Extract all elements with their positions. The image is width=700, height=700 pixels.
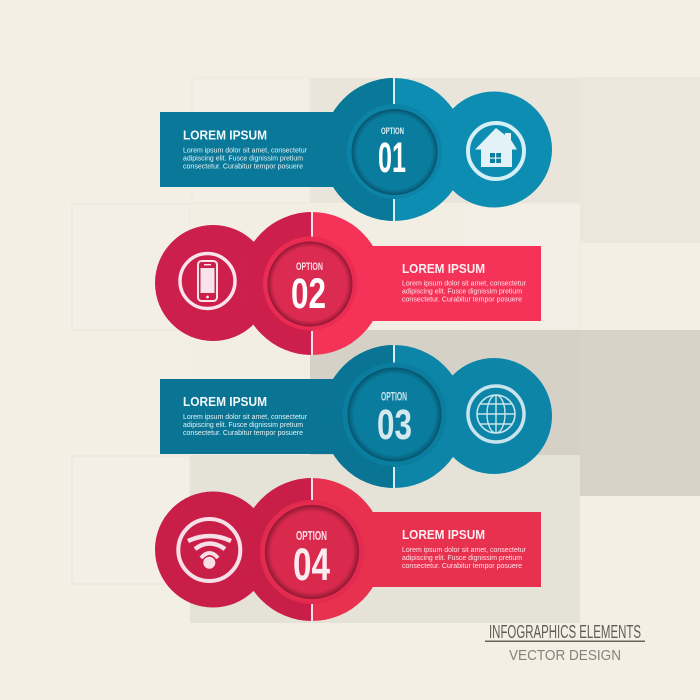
big circle 03 [322, 345, 466, 488]
big circle 02 [240, 212, 384, 355]
description 02: consectetur. Curabitur tempor posuere [402, 296, 522, 304]
icon: wifi [178, 519, 240, 581]
heading 03: LOREM IPSUM [183, 395, 267, 409]
band 03 [160, 379, 360, 454]
option 02 row [155, 212, 541, 355]
description 02: adipiscing elit. Fusce dignissim pretium [402, 288, 522, 296]
option label 03: OPTION [381, 392, 407, 404]
small circle 02 [155, 225, 271, 341]
description 04: consectetur. Curabitur tempor posuere [402, 563, 522, 570]
footer subtitle: VECTOR DESIGN [509, 647, 621, 664]
band 04 [360, 512, 541, 587]
small circle 01 [436, 92, 552, 208]
description 02: Lorem ipsum dolor sit amet, consectetur [402, 280, 527, 288]
description 03: adipiscing elit. Fusce dignissim pretium [183, 422, 303, 429]
band 01 [160, 112, 360, 187]
option label 01: OPTION [381, 126, 404, 137]
option label 02: OPTION [296, 261, 323, 273]
heading 01: LOREM IPSUM [183, 128, 267, 142]
description 01 [183, 148, 308, 170]
small circle 04 [155, 492, 271, 608]
description 04 [402, 547, 527, 570]
small circle 03 [436, 358, 552, 474]
option label 04: OPTION [296, 529, 327, 543]
description 03: Lorem ipsum dolor sit amet, consectetur [183, 414, 308, 421]
heading 04: LOREM IPSUM [402, 528, 485, 542]
big circle 01 [322, 78, 466, 221]
band 02 [360, 246, 541, 321]
option 04 row [155, 478, 541, 621]
description 04: adipiscing elit. Fusce dignissim pretium [402, 555, 522, 562]
number 04: 04 [293, 539, 330, 590]
description 01: Lorem ipsum dolor sit amet, consectetur [183, 148, 308, 154]
description 03 [183, 414, 308, 437]
number 01: 01 [378, 134, 406, 182]
number 02: 02 [291, 270, 326, 318]
icon: house [468, 123, 524, 179]
icon: globe [468, 386, 524, 442]
description 02 [402, 280, 527, 304]
big circle 04 [240, 478, 384, 621]
number 03: 03 [377, 401, 412, 449]
description 04: Lorem ipsum dolor sit amet, consectetur [402, 547, 527, 554]
option 01 row [160, 78, 552, 221]
description 01: adipiscing elit. Fusce dignissim pretium [183, 156, 303, 162]
description 01: consectetur. Curabitur tempor posuere [183, 164, 303, 170]
description 03: consectetur. Curabitur tempor posuere [183, 430, 303, 437]
option 03 row [160, 345, 552, 488]
heading 02: LOREM IPSUM [402, 262, 485, 276]
icon: smartphone [180, 254, 235, 308]
